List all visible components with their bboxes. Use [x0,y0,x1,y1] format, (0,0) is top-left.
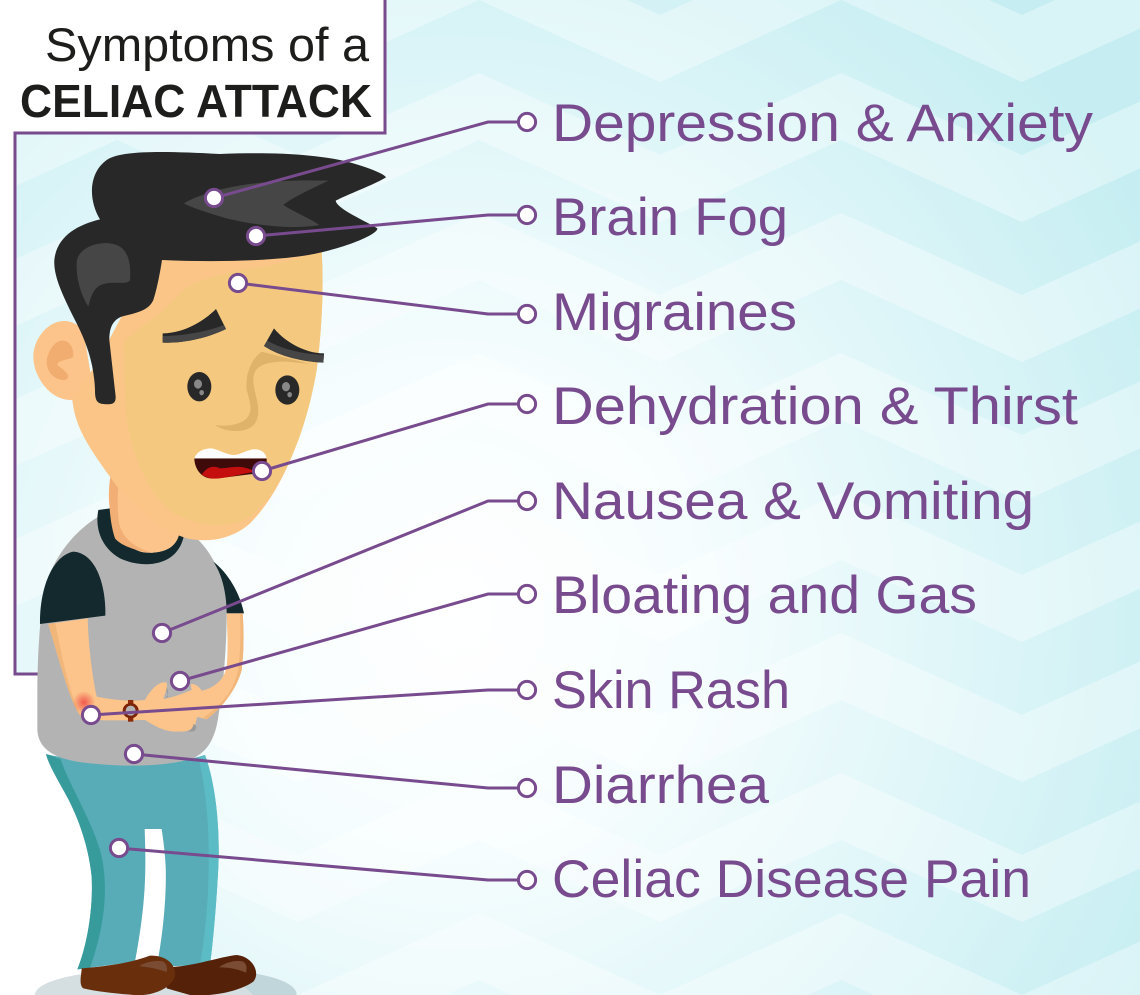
connector: Migraines [229,274,536,323]
hair [54,152,386,404]
shoes [81,955,256,995]
symptom labels: Depression & Anxiety [552,94,1094,153]
symptom labels: Celiac Disease Pain [552,850,1031,909]
eyes [187,372,299,405]
connector: Dehydration & Thirst [253,395,536,480]
neck [109,475,180,553]
connector: Depression & Anxiety [205,113,536,207]
title: Symptoms of a [45,18,370,71]
symptom labels: Brain Fog [552,188,788,247]
symptom labels: Dehydration & Thirst [552,377,1078,436]
white margin panel behind title and figure [0,0,385,995]
collar [97,508,184,564]
symptom labels: Skin Rash [552,661,790,720]
connector: Diarrhea [125,745,536,797]
trousers [46,754,219,969]
title: CELIAC ATTACK [20,75,372,127]
symptom labels: Bloating and Gas [552,566,977,625]
mouth [194,448,267,479]
ear [33,321,93,400]
face [72,252,323,540]
white gap between legs [130,827,170,970]
connector: Bloating and Gas [171,585,536,690]
symptom labels: Diarrhea [552,756,770,815]
skin rash [73,691,95,714]
title frame [15,0,385,674]
symptom labels [552,94,1094,909]
nose [215,352,310,431]
arms and hands [48,613,244,732]
figure: man lower body [35,475,297,995]
shirt [37,517,227,766]
connector: Brain Fog [247,206,536,245]
title [20,18,372,127]
connector: Nausea & Vomiting [153,492,536,642]
watch [123,700,139,722]
figure: man head [33,152,386,540]
symptom labels: Migraines [552,283,797,342]
symptom labels: Nausea & Vomiting [552,472,1034,531]
hair highlights [77,180,328,307]
connector: Skin Rash [82,681,536,724]
ground shadow [35,968,297,995]
connector: Celiac Disease Pain [110,839,536,889]
eyebrows [163,309,324,363]
sleeves [40,552,244,624]
